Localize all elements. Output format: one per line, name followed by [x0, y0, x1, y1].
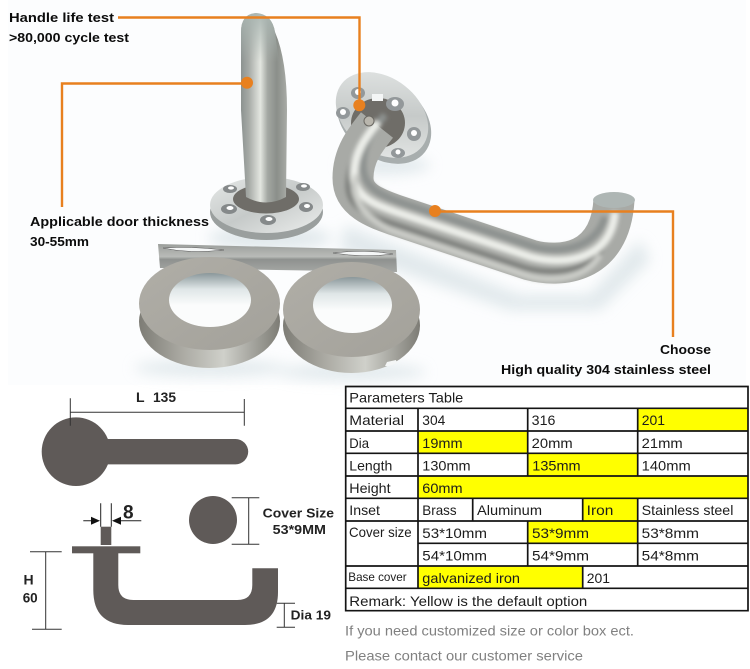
- dimension height: H: [24, 571, 34, 587]
- dimension dia: [277, 603, 331, 627]
- dimension diagram: [23, 389, 334, 629]
- cover size: [189, 496, 334, 544]
- table text: Cover size: [349, 524, 412, 540]
- callout line: stainless steel: [429, 205, 673, 337]
- parameters table: [346, 386, 748, 611]
- icon: spindle bar: [158, 244, 397, 272]
- table text: Base cover: [348, 570, 407, 584]
- callout text: door thickness: Applicable door thickness: [30, 214, 209, 229]
- table text: galvanized iron: [422, 570, 520, 586]
- table text: 54*9mm: [532, 548, 589, 564]
- callout text: door thickness: [30, 214, 209, 249]
- callout text: stainless steel: Choose: [660, 342, 711, 357]
- table text: Stainless steel: [642, 502, 733, 518]
- callout line: handle life test: [118, 18, 365, 111]
- table text: Parameters Table: [349, 390, 464, 406]
- table text: 304: [422, 412, 446, 428]
- table text: 20mm: [532, 435, 573, 451]
- table text: 53*9mm: [532, 525, 589, 541]
- icon: upright handle with rosette: [210, 13, 323, 240]
- icon: lever handle: [348, 115, 635, 279]
- table text: 316: [532, 412, 556, 428]
- table text: Inset: [349, 502, 380, 518]
- icon: right rosette: [319, 54, 448, 182]
- table text: 53*10mm: [422, 525, 487, 541]
- callout line: door thickness: [62, 77, 253, 207]
- table text: 54*10mm: [422, 548, 487, 564]
- table text: Brass: [422, 502, 457, 518]
- callout text: door thickness: 30-55mm: [30, 234, 89, 249]
- icon: left cover ring: [139, 257, 280, 368]
- cover size: 53*9MM: [273, 522, 326, 537]
- table text: Height: [349, 480, 391, 496]
- table text: 130mm: [422, 458, 471, 474]
- lever top view: [42, 389, 248, 486]
- table text: [348, 390, 733, 609]
- cast shadows: [134, 156, 650, 380]
- table text: Material: [349, 412, 404, 428]
- table text: 54*8mm: [642, 548, 699, 564]
- callout text: handle life test: [9, 10, 130, 45]
- icon: right cover ring: [283, 262, 420, 373]
- lever top view: L: [136, 389, 145, 405]
- customization note: [345, 622, 634, 664]
- table text: 201: [642, 412, 665, 428]
- dimension height: 60: [23, 589, 38, 605]
- dimension height: [23, 552, 62, 629]
- callout text: handle life test: >80,000 cycle test: [9, 30, 130, 45]
- table text: 201: [587, 570, 610, 586]
- dimension dia: Dia 19: [291, 607, 331, 622]
- table text: 19mm: [422, 435, 463, 451]
- table text: Dia: [349, 435, 369, 451]
- photo panel: [8, 0, 746, 385]
- table text: Length: [349, 458, 392, 474]
- cover size: Cover Size: [263, 506, 334, 521]
- dimension 8: [83, 502, 141, 527]
- table text: Remark: Yellow is the default option: [349, 593, 587, 609]
- dimension 8: 8: [123, 502, 134, 523]
- lever side view: [72, 527, 278, 625]
- callout text: handle life test: Handle life test: [9, 10, 115, 25]
- table text: 135mm: [532, 458, 581, 474]
- lever top view: 135: [153, 389, 176, 405]
- table grid: [346, 386, 748, 611]
- table text: Aluminum: [477, 502, 542, 518]
- table text: 60mm: [422, 480, 463, 496]
- customization note: If you need customized size or color box ect.: [345, 622, 634, 638]
- customization note: Please contact our customer service: [345, 648, 583, 664]
- table text: 140mm: [642, 458, 691, 474]
- table highlighted cells: [418, 408, 748, 588]
- table text: Iron: [587, 502, 613, 518]
- callout text: stainless steel: [501, 342, 711, 377]
- callout text: stainless steel: High quality 304 stainless steel: [501, 362, 711, 377]
- table text: 53*8mm: [642, 525, 699, 541]
- table text: 21mm: [642, 435, 683, 451]
